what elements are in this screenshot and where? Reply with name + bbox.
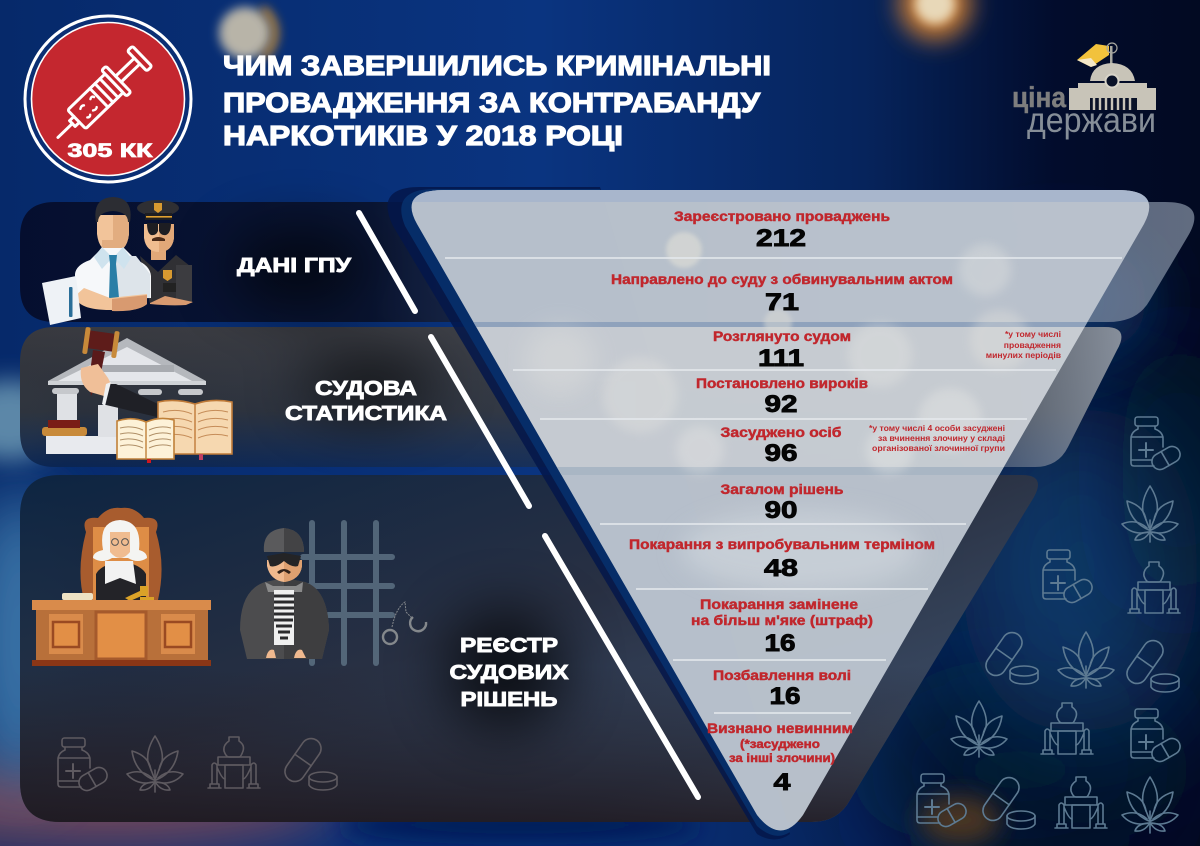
funnel item: загалом рішень (720, 482, 844, 524)
funnel item: позбавлення волі (713, 668, 851, 710)
illustration: prison bars (300, 520, 395, 666)
label: судова статистика (285, 377, 447, 425)
funnel item: випробувальний термін (629, 537, 935, 582)
heading: НАРКОТИКІВ У 2018 РОЦІ (223, 120, 623, 151)
band: дані ГПУ (20, 202, 1194, 322)
funnel item: постановлено вироків: Постановлено вироків (696, 376, 868, 391)
funnel (400, 190, 1150, 830)
logo: ціна держави: ціна (1012, 82, 1067, 114)
badge: 305 КК syringe: 305 КК (68, 141, 153, 162)
illustration: handcuffs (383, 602, 426, 644)
note: організована група: за вчинення злочину у складі (878, 433, 1005, 443)
funnel item: визнано невинним: Визнано невинним (707, 721, 853, 736)
funnel item: засуджено осіб (720, 425, 842, 467)
funnel item: штраф: 16 (764, 630, 796, 657)
funnel item: випробувальний термін: Покарання з випробувальним терміном (629, 537, 935, 552)
funnel item: постановлено вироків (696, 376, 868, 418)
funnel item: визнано невинним: за інші злочини) (729, 753, 835, 765)
funnel item: розглянуто судом: Розглянуто судом (713, 329, 851, 344)
funnel item: засуджено осіб: 96 (764, 440, 798, 467)
funnel item: визнано невинним: (*засуджено (740, 739, 820, 751)
funnel item: загалом рішень: Загалом рішень (720, 482, 844, 497)
slash divider: ГПУ (359, 213, 415, 311)
funnel item: позбавлення волі: Позбавлення волі (713, 668, 851, 683)
slash divider: реєстр (545, 536, 698, 797)
funnel item: позбавлення волі: 16 (770, 683, 800, 710)
note: минулих періодів: провадження (1004, 340, 1061, 350)
funnel item: штраф: Покарання замінене (700, 597, 858, 612)
funnel item: розглянуто судом (713, 329, 851, 372)
funnel item: направлено до суду: Направлено до суду з обвинувальним актом (611, 272, 953, 287)
funnel dividers (445, 258, 1122, 713)
label: реєстр судових рішень: СУДОВИХ (450, 661, 569, 684)
logo: ціна держави: держави (1027, 101, 1156, 140)
label: реєстр судових рішень: РЕЄСТР (460, 634, 558, 657)
funnel item: направлено до суду: 71 (765, 289, 799, 316)
label: судова статистика: СТАТИСТИКА (285, 402, 447, 425)
funnel item: визнано невинним: 4 (774, 769, 791, 796)
illustration: masked prisoner (240, 528, 329, 659)
heading (223, 50, 771, 151)
funnel item: направлено до суду (611, 272, 953, 316)
note: організована група (869, 423, 1005, 453)
funnel item: зареєстровано: Зареєстровано проваджень (674, 209, 890, 224)
slash divider: судова статистика (431, 337, 529, 506)
label: реєстр судових рішень (450, 634, 569, 711)
funnel item: загалом рішень: 90 (764, 497, 798, 524)
band: реєстр судових рішень (20, 475, 1038, 822)
icon pattern: right side (917, 417, 1183, 833)
band: судова статистика (20, 327, 1121, 467)
note: організована група: організованої злочинної групи (872, 443, 1005, 453)
heading: ПРОВАДЖЕННЯ ЗА КОНТРАБАНДУ (223, 87, 761, 118)
illustration: judge at desk (32, 508, 211, 666)
funnel shadow layers (387, 187, 790, 840)
note: минулих періодів: минулих періодів (986, 350, 1061, 360)
note: минулих періодів: *у тому числі (1005, 329, 1061, 339)
funnel item: випробувальний термін: 48 (764, 555, 798, 582)
label: судова статистика: СУДОВА (315, 377, 417, 400)
icon row: bottom left band (58, 735, 337, 793)
funnel item: визнано невинним (707, 721, 853, 796)
funnel item: штраф (691, 597, 873, 657)
funnel item: зареєстровано (674, 209, 890, 252)
funnel item: зареєстровано: 212 (756, 225, 806, 252)
note: минулих періодів (986, 329, 1061, 360)
funnel item: засуджено осіб: Засуджено осіб (720, 425, 842, 440)
illustration: courthouse, gavel and books (42, 327, 232, 463)
funnel item: штраф: на більш м'яке (штраф) (691, 613, 873, 628)
funnel item: постановлено вироків: 92 (764, 391, 798, 418)
funnel item: розглянуто судом: 111 (758, 345, 804, 372)
badge: 305 КК syringe (25, 16, 191, 182)
heading: ЧИМ ЗАВЕРШИЛИСЬ КРИМІНАЛЬНІ (223, 50, 771, 81)
label: дані ГПУ: ДАНІ ГПУ (237, 254, 351, 277)
dark glow behind side labels (230, 233, 565, 730)
label: реєстр судових рішень: РІШЕНЬ (460, 688, 558, 711)
logo: ціна держави (1012, 43, 1156, 140)
illustration: prosecutor and police officer (42, 197, 193, 325)
note: організована група: *у тому числі 4 особи засуджені (869, 423, 1005, 433)
